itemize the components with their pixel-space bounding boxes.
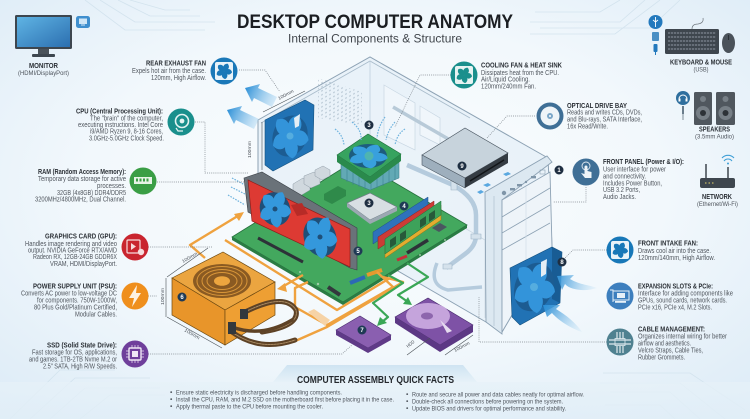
numbered badges: 1 [557, 168, 561, 174]
dimension labels: 100mm [453, 340, 471, 353]
panel: quick facts: Double-check all connections before powering on the system. [412, 398, 563, 406]
numbered badges: 6 [180, 295, 184, 301]
callout: CPU: i9/AMD Ryzen 9, 8-16 Cores, [90, 129, 163, 136]
numbered badges: 9 [460, 164, 464, 170]
panel: quick facts: • [170, 396, 173, 404]
callout: expansion slots: PCIe x16, PCIe x4, M.2 Slots. [638, 304, 712, 312]
numbered badges [178, 120, 566, 334]
dimension labels [160, 88, 473, 355]
callout: power supply: Modular Cables. [75, 312, 117, 318]
numbered badges: 3 [367, 201, 371, 207]
numbered badges: 5 [356, 249, 360, 255]
callout: graphics card: GRAPHICS CARD (GPU): [45, 232, 117, 240]
heat sink and cooling fan [337, 134, 401, 190]
peripheral: network router: NETWORK [702, 192, 733, 201]
callout: graphics card: Radeon RX, 12GB-24GB GDDR6X [33, 254, 117, 261]
callout: CPU: CPU (Central Processing Unit): [76, 106, 163, 116]
callout: power supply: Converts AC power to low-voltage DC [21, 291, 117, 298]
callout: cooling fan [450, 60, 563, 90]
callout: SSD: and games. 1TB-2TB Nvme M.2 or [29, 356, 118, 364]
dimension labels: HDD [405, 339, 416, 349]
internal cable bundle [407, 165, 482, 290]
callout: expansion slots: GPUs, sound cards, network cards. [638, 298, 727, 304]
callout: rear exhaust fan: REAR EXHAUST FAN [146, 58, 206, 68]
callout: front panel: FRONT PANEL (Power & I/O): [603, 157, 684, 166]
callout: RAM [35, 167, 156, 204]
callout: front panel: Audio Jacks. [603, 194, 636, 201]
peripheral: monitor: MONITOR [29, 61, 59, 70]
peripheral: network router [697, 155, 738, 208]
callout: cable management: Velcro Straps, Cable Ties, [638, 348, 703, 354]
numbered badges: 3 [367, 123, 371, 129]
panel: quick facts: Update BIOS and drivers for optimal performance and stability. [412, 406, 566, 412]
computer case shell [258, 57, 552, 332]
dimension labels: 100mm [160, 288, 165, 305]
callout: cable management [606, 324, 728, 362]
callout: optical drive: OPTICAL DRIVE BAY [567, 101, 627, 110]
callout: expansion slots [606, 282, 733, 312]
callout: front intake fan [606, 236, 715, 264]
panel: quick facts: Route and secure all power and data cables neatly for optimal airflow. [412, 392, 584, 398]
peripheral: monitor: (HDMI/DisplayPort) [18, 70, 69, 77]
callout: graphics card: output. NVIDIA GeForce RTX/AMD [28, 248, 117, 254]
callout: optical drive: and Blu-rays, SATA Interface, [567, 116, 642, 124]
callout: RAM: 32GB (4x8GB) DDR4/DDR5 [57, 190, 126, 197]
panel: quick facts: COMPUTER ASSEMBLY QUICK FACTS [297, 374, 454, 386]
callout: expansion slots: Interface for adding components like [638, 291, 733, 298]
dimension labels: 100mm [247, 141, 252, 158]
numbered badges: 4 [402, 204, 406, 210]
callout: front intake fan: Draws cool air into the case. [638, 248, 711, 255]
motherboard [232, 160, 467, 305]
panel: quick facts: • [406, 398, 409, 406]
numbered badges: 8 [560, 260, 564, 266]
callout: front panel: Includes Power Button, [603, 180, 662, 188]
callout: power supply: POWER SUPPLY UNIT (PSU): [33, 282, 117, 290]
callout: cooling fan: Dissipates heat from the CPU. [481, 70, 559, 77]
exhaust arrows [227, 84, 277, 129]
callout: SSD: SSD (Solid State Drive): [47, 340, 117, 350]
callout: front panel [572, 157, 684, 201]
callout: SSD: Fast storage for OS, applications, [32, 350, 117, 357]
panel: quick facts: • [406, 392, 409, 398]
callout: cooling fan: 120mm/240mm Fan. [481, 84, 536, 90]
callout: front intake fan: FRONT INTAKE FAN: [638, 238, 698, 248]
green data cables [373, 263, 428, 326]
callout: expansion slots: EXPANSION SLOTS & PCIe: [638, 282, 713, 290]
callout: CPU: executing instructions. Intel Core [78, 122, 163, 129]
callout: RAM: Temporary data storage for active [38, 176, 126, 183]
peripheral: monitor [15, 15, 90, 77]
callout: optical drive: 16x Read/Write. [567, 124, 608, 130]
callout: RAM: 3200MHz/4800MHz, Dual Channel. [35, 196, 126, 204]
callout: cable management: CABLE MANAGEMENT: [638, 324, 705, 334]
PSU cable bundle [228, 301, 296, 344]
hard disk drive [395, 298, 473, 352]
callout: graphics card: Handles image rendering and video [25, 241, 117, 248]
callout: rear exhaust fan: Expels hot air from the case. [132, 68, 206, 75]
peripheral: speakers: (3.5mm Audio) [695, 134, 734, 140]
callout: CPU: 3.0GHz-5.0GHz Clock Speed. [89, 136, 164, 142]
front panel of case [485, 156, 552, 334]
panel: quick facts: • [170, 390, 173, 396]
panel: quick facts: Apply thermal paste to the CPU before mounting the cooler. [176, 404, 323, 410]
peripheral: network router: (Ethernet/Wi-Fi) [697, 201, 738, 208]
callout: optical drive: Reads and writes CDs, DVDs, [567, 110, 642, 117]
callout: cable management: Organizes internal wiring for better [638, 334, 728, 340]
callout: CPU [76, 106, 194, 142]
callout: RAM: processes. [97, 183, 126, 190]
leader lines [148, 70, 607, 354]
dimension labels: 100mm [184, 328, 201, 340]
title block: Internal Components & Structure [288, 34, 462, 46]
panel: quick facts [0, 365, 750, 419]
callout: cooling fan: COOLING FAN & HEAT SINK [481, 60, 563, 70]
callout: CPU: The "brain" of the computer, [90, 116, 163, 122]
airflow arrows above cooler [228, 117, 405, 205]
callout: graphics card [25, 232, 148, 268]
peripheral: speakers [676, 91, 735, 140]
SSD [336, 316, 391, 353]
peripheral: speakers: SPEAKERS [699, 124, 730, 134]
callout: cable management: airflow and aesthetics. [638, 340, 691, 348]
callout: rear exhaust fan [132, 58, 238, 84]
CPU chip [347, 193, 397, 224]
title block [237, 12, 513, 46]
callout: front panel: User interface for power [603, 166, 667, 174]
peripheral: keyboard and mouse: KEYBOARD & MOUSE [670, 58, 732, 66]
intake arrows [543, 275, 597, 332]
front intake fan [507, 247, 562, 325]
callout: optical drive [536, 101, 642, 130]
optical drive [422, 128, 511, 194]
callout: SSD: 2.5" SATA, High R/W Speeds. [43, 364, 117, 370]
peripheral: keyboard and mouse [648, 15, 735, 74]
callout: front intake fan: 120mm/140mm, High Airflow. [638, 255, 715, 262]
callout: rear exhaust fan: 120mm, High Airflow. [151, 75, 206, 82]
numbered badges: 7 [360, 328, 364, 334]
panel: quick facts: Install the CPU, RAM, and M.2 SSD on the motherboard first before placing it in the case. [176, 396, 394, 404]
callout: front panel: USB 3.2 Ports, [603, 187, 640, 194]
graphics card [244, 172, 357, 270]
callout: power supply [21, 282, 148, 318]
orange power cables [190, 212, 403, 342]
power supply unit [172, 252, 275, 345]
panel: quick facts: • [170, 404, 173, 410]
rear exhaust fan [265, 100, 314, 171]
callout: SSD [29, 340, 148, 370]
callout: front panel: and connectivity. [603, 174, 646, 180]
dimension labels: 100mm [277, 88, 295, 101]
callout: graphics card: VRAM, HDMI/DisplayPort. [50, 261, 117, 268]
title block: DESKTOP COMPUTER ANATOMY [237, 12, 513, 33]
callout: cable management: Rubber Grommets. [638, 354, 685, 362]
dimension labels: 100mm [181, 251, 198, 264]
RAM modules [373, 197, 441, 258]
callout: cooling fan: Air/Liquid Cooling. [481, 76, 530, 84]
callout: RAM: RAM (Random Access Memory): [38, 167, 126, 176]
panel: quick facts: • [406, 406, 409, 412]
peripheral: keyboard and mouse: (USB) [694, 66, 708, 74]
callout: power supply: for components. 750W-1000W, [37, 298, 117, 304]
panel: quick facts: Ensure static electricity is discharged before handling components. [176, 390, 342, 396]
callout: power supply: 80 Plus Gold/Platinum Certified, [34, 304, 117, 312]
